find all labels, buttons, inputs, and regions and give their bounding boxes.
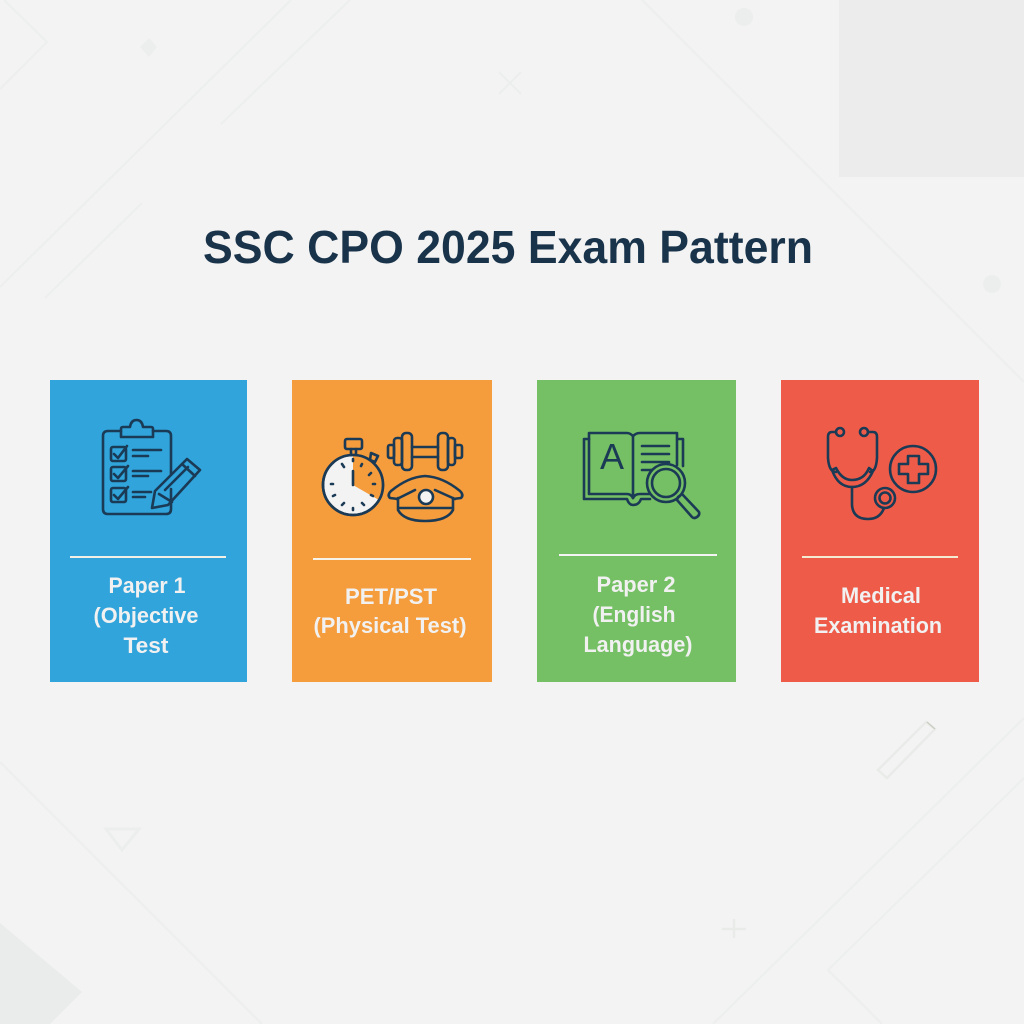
icon: clipboard and pencil	[103, 420, 200, 514]
divider	[802, 556, 958, 558]
label	[94, 573, 198, 658]
panel: Paper 1	[50, 380, 247, 682]
label: Test	[124, 633, 169, 658]
divider	[559, 554, 717, 556]
decorative corner triangle	[0, 923, 82, 1024]
label: (English	[592, 602, 676, 627]
label: (Objective	[94, 603, 198, 628]
title: SSC CPO 2025 Exam Pattern	[203, 221, 813, 273]
panel: Medical Examination	[781, 380, 979, 682]
label: Paper 1	[108, 573, 186, 598]
icon letter A: A	[600, 436, 624, 477]
label: Language)	[584, 632, 692, 657]
label: Examination	[814, 613, 942, 638]
icon: stopwatch, dumbbell and cap	[323, 433, 462, 521]
icon: open book and magnifier	[584, 433, 699, 518]
icon: stethoscope and medical cross	[828, 428, 936, 519]
label: PET/PST	[345, 584, 438, 609]
label	[814, 583, 942, 638]
divider	[313, 558, 471, 560]
divider	[70, 556, 226, 558]
label: Medical	[841, 583, 921, 608]
panel: PET/PST	[292, 380, 492, 682]
label	[314, 584, 466, 638]
label: (Physical Test)	[314, 613, 466, 638]
decorative shapes	[106, 8, 1001, 938]
label: Paper 2	[596, 572, 676, 597]
label	[584, 572, 692, 657]
decorative corner block	[839, 0, 1024, 177]
panel: Paper 2	[537, 380, 736, 682]
